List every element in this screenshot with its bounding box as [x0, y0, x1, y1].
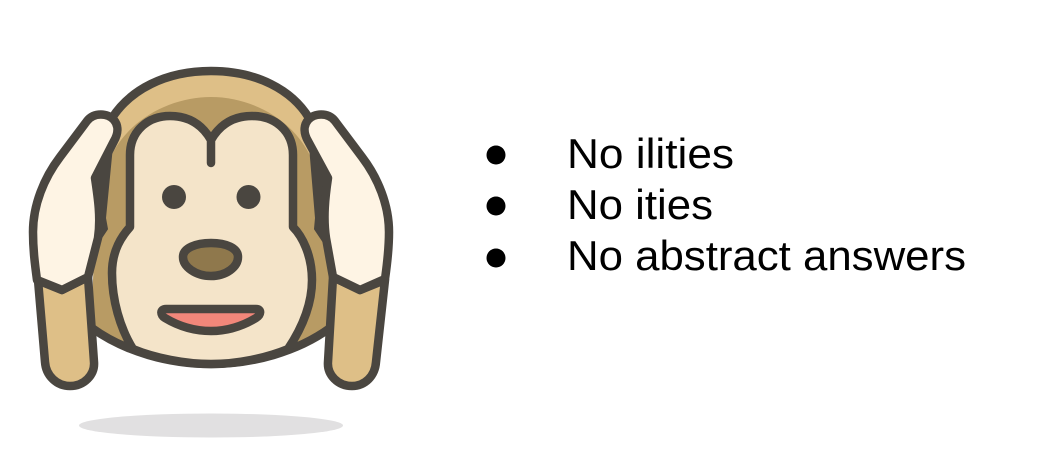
monkey face	[112, 116, 312, 364]
nose	[183, 243, 238, 276]
left arm	[38, 277, 94, 386]
icon: monkey covering ears	[33, 71, 389, 386]
bullet list	[486, 130, 966, 279]
right eye	[236, 185, 260, 209]
list item: No ities	[486, 181, 713, 228]
left eye	[162, 185, 186, 209]
right arm	[328, 277, 385, 386]
list item: No ilities: No ilities	[567, 130, 734, 177]
mouth	[161, 309, 260, 331]
list item: No abstract answers: No abstract answers	[567, 232, 966, 279]
list item: No ilities	[486, 130, 734, 177]
ground shadow	[79, 414, 343, 438]
list item: No ities: No ities	[567, 181, 713, 228]
right hand	[305, 114, 389, 290]
monkey head	[92, 71, 330, 364]
left hand	[33, 114, 117, 290]
